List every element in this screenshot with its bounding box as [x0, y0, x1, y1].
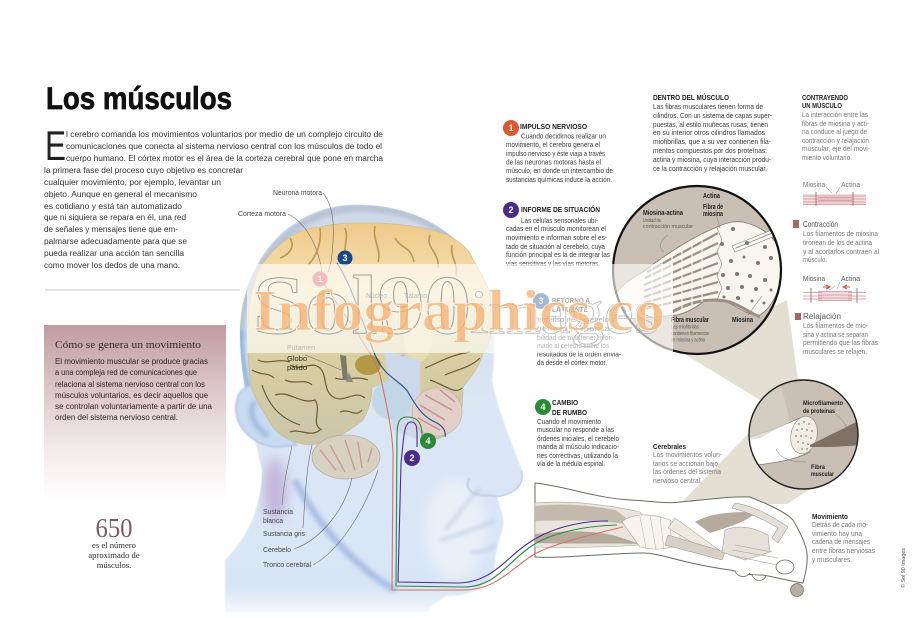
ball [790, 584, 804, 596]
text: contracción: Contracción [803, 220, 838, 229]
step 3: retorno a la fuente: bilidad de mantener infor- [537, 333, 613, 342]
circle labels: miosina [703, 211, 723, 218]
text: dentro del músculo: DENTRO DEL MÚSCULO [653, 93, 729, 102]
intro text block: que ni siquiera se repara en él, una red [44, 212, 186, 222]
step 4: cambio de rumbo: vía de la médula espinal. [537, 459, 605, 468]
intro text block: l cerebro comanda los movimientos voluntarios por medio de un complejo circuito de [66, 129, 383, 139]
brain folds [280, 226, 456, 275]
text: contrayendo un músculo: na conduce al juego de [802, 127, 867, 136]
intro text block: cualquier movimiento, por ejemplo, levantar un [44, 177, 221, 187]
step 1: impulso nervioso: de las neuronas motoras hasta el [506, 158, 601, 166]
brain: cerebrum [248, 223, 493, 445]
watermark text: Infographics.co [253, 278, 665, 343]
illustration: head with brain section [224, 192, 534, 612]
statistic: 650 muscles: es el número [92, 540, 136, 550]
panel body text: a una compleja red de comunicaciones que [55, 368, 197, 377]
step 1: impulso nervioso: músculo, en donde un intercambio de [506, 166, 613, 175]
step 3: retorno a la fuente: da desde el córtex motor. [537, 358, 607, 367]
text: contracción: Los filamentos de miosina [803, 229, 879, 238]
circle labels: Unidad de [643, 218, 661, 224]
intro text block: cuerpo humano. El córtex motor es el área de la corteza cerebral que pone en marcha [66, 153, 383, 163]
cross-section dots [720, 227, 773, 304]
step 4: cambio de rumbo: CAMBIO [552, 398, 578, 407]
labels: brain anatomy: Neurona motora [273, 190, 322, 197]
labels: brain anatomy: blanca [263, 518, 283, 525]
statistic: 650 muscles: músculos. [97, 560, 131, 570]
striations [644, 233, 718, 309]
zoom cone: big circle to small circle [678, 300, 798, 400]
text: contracción: y al acortarlos contraen al [803, 247, 879, 256]
step 4: cambio de rumbo [535, 398, 619, 468]
marker 3 on head: 3 [342, 253, 348, 263]
text: relajación: permitiendo que las fibras [803, 338, 878, 347]
illustration: arm and hand [535, 483, 807, 596]
labels: brain anatomy: Núcleo [366, 293, 387, 300]
labels: brain anatomy: Sustancia [263, 509, 293, 516]
zoom circle: microfilament detail: muscular [811, 471, 834, 478]
step 2: informe de situación: movimiento e informan sobre el es- [506, 233, 607, 242]
text: relajación: Los filamentos de mio- [803, 321, 868, 330]
text: cerebrales: tarios se accionan bajo [653, 459, 718, 468]
panel body text: relaciona al sistema nervioso central con los [55, 380, 205, 389]
panel body text: músculos voluntarios, es decir aquellos que [55, 391, 209, 400]
marker 2 on head [404, 450, 420, 466]
labels: brain anatomy: Corteza motora [238, 211, 286, 218]
circle labels: de miosina y actina [671, 338, 706, 344]
step 1: impulso nervioso: sustancias químicas induce la acción. [506, 175, 612, 184]
step 3: retorno a la fuente: resultados de la orden envia- [537, 350, 621, 358]
text: contracción: músculo. [803, 255, 827, 264]
image credit: © Sol 90 Images [900, 548, 907, 588]
zoom circle: microfilament detail: de proteínas [803, 408, 835, 415]
watermark text: Sol90 [253, 259, 471, 352]
diagram: myosin and actin at rest: Miosina [803, 180, 826, 189]
title: Los músculos [46, 80, 232, 116]
text: dentro del músculo: miofibrillas, que a su vez contienen fila- [653, 137, 771, 146]
intro text block: es cotidiano y está tan automatizado [44, 201, 182, 211]
drop cap: E [45, 122, 66, 169]
watermark text [253, 259, 665, 352]
statistic: 650 muscles [88, 513, 140, 570]
text: contracción [793, 220, 879, 264]
forearm muscles [535, 502, 650, 547]
text: contrayendo un músculo: CONTRAYENDO [802, 93, 848, 102]
statistic: 650 muscles: aproximado de [88, 550, 140, 560]
step 4: cambio de rumbo: órdenes iniciales, el cerebelo [537, 434, 619, 443]
zoom circle: microfilament detail: Microfilamento [803, 400, 843, 407]
labels: brain anatomy [238, 190, 427, 569]
text: cerebrales: Los movimientos volun- [653, 450, 722, 459]
circle labels: contracción muscular [643, 224, 693, 230]
step 2: informe de situación: 2 [508, 205, 514, 215]
step 4: cambio de rumbo: DE RUMBO [552, 408, 587, 417]
step 2: informe de situación: INFORME DE SITUACIÓN [521, 205, 600, 214]
diagram: myosin and actin contracted: Actina [841, 274, 861, 283]
step 1: impulso nervioso: Cuando decidimos realizar un [521, 132, 606, 140]
arm skin outline [535, 483, 807, 583]
text: cerebrales: Cerebrales [653, 442, 686, 451]
marker 4 on head [420, 433, 436, 449]
intro text block: palmarse adecuadamente para que se [44, 236, 187, 246]
text: dentro del músculo: en su interior otros cilindros llamados [653, 128, 765, 137]
zoom cone: small circle to arm [680, 432, 812, 504]
panel body text: El movimiento muscular se produce gracias [55, 357, 208, 366]
text: contrayendo un músculo: miento voluntario. [802, 153, 852, 162]
step 2: informe de situación: Las células sensoriales ubi- [521, 216, 598, 225]
step 3: retorno a la fuente: LA FUENTE [552, 305, 588, 314]
panel: cómo se genera un movimiento [44, 325, 226, 501]
step 3: retorno a la fuente: RETORNO A [552, 296, 591, 305]
circle labels: contienen filamentos [671, 331, 709, 337]
text: relajación: sina y actina se separan [803, 330, 868, 339]
nerve pathway lines [323, 263, 623, 590]
text: contrayendo un músculo: UN MÚSCULO [802, 101, 842, 110]
zoom circle: muscle fibre interior [612, 186, 782, 354]
text: contrayendo un músculo: fibras de miosina y acti- [802, 119, 869, 128]
text: dentro del músculo: Las fibras musculares tienen forma de [653, 102, 763, 111]
labels: brain anatomy: Sustancia gris [263, 531, 305, 538]
text: cerebrales: las órdenes del sistema [653, 467, 722, 476]
step 4: cambio de rumbo: 4 [540, 402, 546, 412]
labels: brain anatomy: Putamen [287, 345, 315, 352]
marker 2 on head: 2 [409, 453, 415, 463]
step 4: cambio de rumbo: muscular no responde a las [537, 425, 614, 434]
circle labels: Fibra de [703, 204, 723, 211]
text: dentro del músculo: actina y miosina, cuya interacción produ- [653, 155, 771, 164]
text: movimiento: entre fibras nerviosas [812, 546, 875, 555]
text: dentro del músculo: cilindros. Con un sistema de capas super- [653, 111, 772, 120]
text: relajación: musculares se relajen. [803, 347, 867, 356]
text: movimiento: vimiento hay una [812, 529, 863, 538]
step 4: cambio de rumbo: Cuando el movimiento [537, 417, 601, 426]
step 2: informe de situación: tado de situación al cerebelo, cuya [506, 242, 606, 251]
step 1: impulso nervioso: impulso nervioso y éste viaja a través [506, 149, 605, 158]
text: movimiento: Detrás de cada mo- [812, 520, 868, 529]
intro text block: comunicaciones que conecta al sistema nervioso central con los músculos de todo el [66, 141, 382, 151]
step 3: retorno a la fuente: mado al cerebro sobre los [537, 341, 609, 350]
step 1: impulso nervioso: movimiento, el cerebro genera el [506, 140, 600, 149]
text: cerebrales [653, 442, 722, 485]
marker 4 on head: 4 [425, 436, 431, 446]
panel heading: Cómo se genera un movimiento [55, 339, 202, 351]
intro text block: la primera fase del proceso cuyo objetivo es concretar [44, 165, 243, 175]
cerebellum [312, 388, 462, 479]
intro text block: pueda realizar una acción tan sencilla [44, 248, 184, 258]
fibre end filament [732, 230, 775, 252]
marker 1 on head: 1 [317, 274, 323, 284]
text: dentro del músculo: ce la contracción y relajación muscular. [653, 164, 767, 173]
intro text block: objeto. Aunque en general el mecanismo [44, 189, 197, 199]
intro text block: como mover los dedos de una mano. [44, 260, 180, 270]
watermark text: images [470, 279, 660, 347]
text: movimiento: y musculares. [812, 555, 852, 564]
zoom circle: microfilament detail [749, 380, 860, 489]
step 3: retorno a la fuente [533, 293, 621, 367]
circle labels: Fibra muscular [671, 317, 709, 324]
labels: brain anatomy: pálido [287, 365, 307, 372]
text: contrayendo un músculo [802, 93, 870, 162]
watermark band [247, 264, 673, 353]
circle labels: Actina [703, 193, 720, 200]
step 3: retorno a la fuente: Impulso del cerebelo [537, 315, 609, 324]
text: relajación: Relajación [803, 312, 841, 321]
muscle fibre body [612, 222, 782, 320]
text: dentro del músculo [653, 93, 772, 173]
head silhouette [225, 205, 523, 612]
step 2: informe de situación: función principal es la de integrar las [506, 250, 610, 259]
panel body text: orden del sistema nervioso central. [55, 413, 178, 422]
arrows: contraction direction [823, 285, 850, 289]
text: dentro del músculo: mentos compuestos por dos proteínas: [653, 146, 767, 155]
step 2: informe de situación: vías sensitivas y las vías motoras. [506, 259, 600, 268]
text: movimiento: Movimiento [812, 512, 848, 521]
text: movimiento [812, 512, 875, 564]
labels: brain anatomy: Cerebelo [263, 547, 291, 554]
fingers [776, 560, 794, 574]
text: contrayendo un músculo: muscular, eje del movi- [802, 144, 870, 153]
leader lines [282, 193, 378, 565]
circle labels: Miosina-actina [643, 210, 683, 217]
marker 3 on head [338, 250, 352, 266]
step 1: impulso nervioso: IMPULSO NERVIOSO [520, 122, 587, 131]
step 4: cambio de rumbo: manda al músculo indicacio- [537, 442, 619, 451]
intro text block [44, 122, 383, 270]
arm nerve lines [523, 521, 623, 557]
step 3: retorno a la fuente: tiene la responsa- [537, 324, 614, 333]
marker 1 on head [312, 272, 328, 286]
text: dentro del músculo: puestas, al estilo muñecas rusas, tienen [653, 120, 768, 129]
diagram: myosin and actin contracted [803, 274, 866, 303]
diagram: myosin and actin contracted: Miosina [803, 274, 826, 283]
labels: brain anatomy: Tronco cerebral [263, 562, 311, 569]
labels: brain anatomy: Globo [287, 356, 307, 363]
text: movimiento: cadena de mensajes [812, 537, 870, 546]
zoom circle: microfilament detail: Fibra [811, 464, 825, 471]
step 1: impulso nervioso [503, 120, 613, 184]
intro text block: de señales y mensajes tiene que em- [44, 224, 178, 234]
circle labels: Las miofibrillas [671, 324, 699, 330]
text: relajación [795, 312, 878, 356]
step 4: cambio de rumbo: nes correctivas, utilizando la [537, 451, 619, 460]
step 1: impulso nervioso: 1 [508, 123, 514, 133]
diagram: myosin and actin at rest: Actina [841, 180, 861, 189]
step 2: informe de situación [503, 202, 610, 268]
text: contrayendo un músculo: contracción y relajación [802, 136, 869, 145]
step 3: retorno a la fuente: 3 [538, 296, 544, 306]
panel body text [55, 357, 213, 422]
circle labels: Miosina [732, 317, 753, 324]
ear [236, 386, 296, 447]
statistic: 650 muscles: 650 [96, 513, 132, 543]
labels: brain anatomy: Tálamo [404, 293, 427, 300]
step 2: informe de situación: cadas en el músculo monitorean el [506, 224, 606, 233]
circle labels [643, 193, 753, 344]
panel body text: se controlan voluntariamente a partir de una [55, 402, 213, 411]
text: contracción: tironean de los de actina [803, 238, 873, 247]
text: contrayendo un músculo: La interacción entre las [802, 110, 868, 119]
text: cerebrales: nervioso central. [653, 476, 702, 485]
diagram: myosin and actin at rest [803, 180, 866, 206]
